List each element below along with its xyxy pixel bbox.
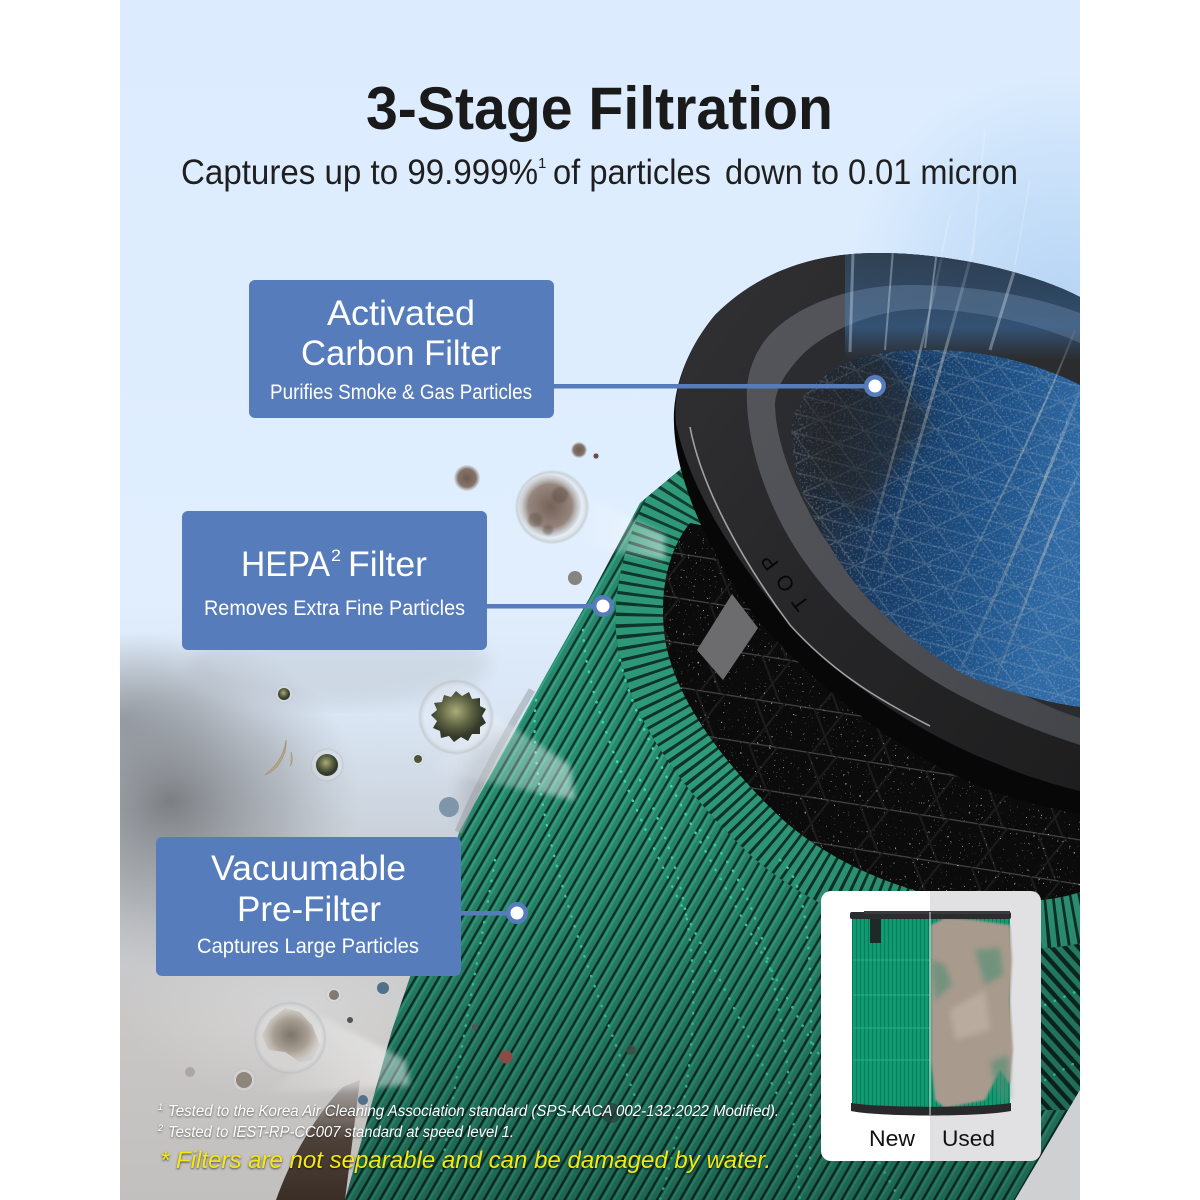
page background: [120, 0, 1080, 1200]
large dust ball: [515, 470, 589, 544]
callout: HEPA filter: [182, 511, 614, 650]
connector line: [484, 604, 603, 608]
footnotes: Tested to IEST-RP-CC007 standard at speed level 1.: [168, 1124, 514, 1141]
airflow wisps: [305, 516, 669, 1091]
label box: [156, 837, 461, 976]
light corner lower right: [1015, 1090, 1080, 1200]
blue mesh window: [785, 340, 1085, 715]
subtitle: down to 0.01 micron: [725, 153, 1018, 192]
description: Captures Large Particles: [197, 935, 419, 958]
hair fibre: [265, 740, 292, 775]
label box: [249, 280, 554, 418]
connector line: [550, 384, 875, 388]
description: Removes Extra Fine Particles: [204, 597, 465, 620]
heading: 2: [331, 546, 341, 565]
filter illustration: [276, 130, 1090, 1200]
footnotes: [157, 1102, 779, 1141]
footnotes: 1: [158, 1102, 163, 1112]
dust clump in bubble: [253, 1001, 327, 1075]
connector line: [458, 911, 517, 916]
rim face: [675, 253, 1080, 791]
plastic frame edge: [458, 690, 532, 832]
callout: vacuumable pre-filter: [156, 837, 528, 976]
marker dot: [592, 595, 614, 617]
footnotes: 2: [157, 1123, 163, 1133]
activated carbon inner core: [663, 523, 1080, 900]
blue spore: [439, 797, 459, 817]
callout: activated carbon filter: [249, 280, 886, 418]
grey gasket ring: [747, 285, 1080, 745]
subtitle: of particles: [553, 153, 711, 192]
subtitle: 1: [538, 155, 546, 172]
teal dotted seams: [440, 630, 1080, 1200]
rim highlight line: [690, 427, 930, 726]
dark base shadow at lower left: [276, 1080, 360, 1200]
small pollen bubbles: [274, 684, 424, 782]
small dust particles: [185, 442, 636, 1123]
card: new vs used comparison: [821, 891, 1041, 1161]
heading: HEPA: [241, 545, 331, 584]
subtitle: Captures up to 99.999%: [181, 153, 538, 192]
heading: Activated: [327, 294, 475, 333]
footnotes: Tested to the Korea Air Cleaning Association standard (SPS-KACA 002-132:2022 Modified).: [168, 1103, 779, 1120]
heading: [241, 545, 427, 584]
filter cartridge photo: [850, 911, 1013, 1116]
heading: Filter: [348, 545, 427, 584]
particles and airflow: [185, 442, 665, 1123]
large pollen bubble: [418, 679, 494, 755]
Used label: Used: [942, 1126, 995, 1151]
water damage warning: * Filters are not separable and can be damaged by water.: [160, 1147, 771, 1174]
description: Purifies Smoke & Gas Particles: [270, 381, 532, 404]
heading: Pre-Filter: [237, 890, 381, 929]
marker dot: [506, 902, 528, 924]
airflow light rays: [862, 240, 1080, 680]
small dust clumps: [232, 982, 389, 1105]
dust layer: [931, 918, 1013, 1108]
inner dark collar: [775, 309, 1080, 718]
outer black rim: [674, 130, 1085, 814]
New label: New: [869, 1126, 916, 1151]
subtitle: [181, 153, 1018, 192]
red particle: [500, 1050, 512, 1064]
label box: [182, 511, 487, 650]
heading: Carbon Filter: [301, 334, 501, 373]
title: 3-Stage Filtration: [366, 75, 833, 142]
heading: Vacuumable: [211, 849, 406, 888]
marker dot: [864, 375, 886, 397]
velcro patch: [697, 594, 758, 680]
TOP label: TOP: [750, 540, 814, 615]
pre-filter green pleated body: [345, 400, 1090, 1200]
